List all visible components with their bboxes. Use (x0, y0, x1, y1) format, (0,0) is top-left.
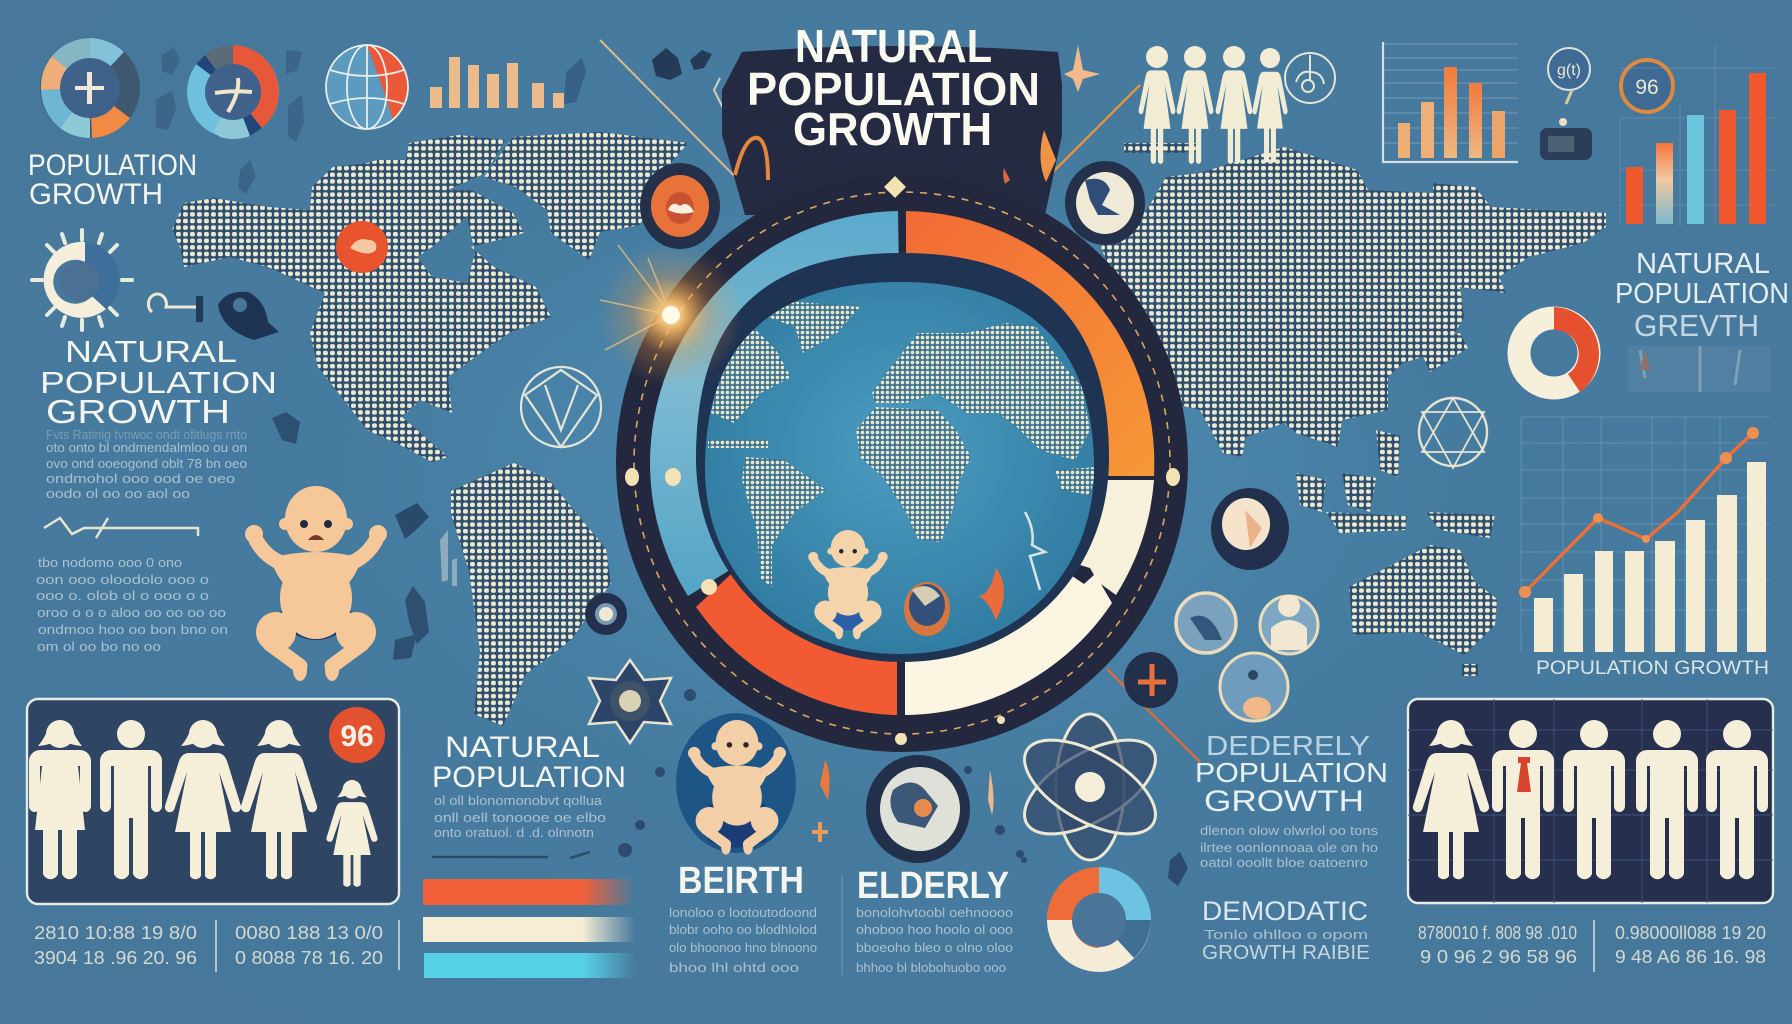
icon: orange sparks (812, 760, 994, 842)
icon: dark orange blob (1124, 652, 1178, 708)
heading: natural population growth left: NATURAL (65, 334, 237, 369)
ring segment: blue (650, 211, 902, 596)
person: man four (1706, 720, 1768, 879)
left star circle icon (521, 367, 601, 447)
hexagon icon three (1220, 653, 1288, 721)
left lower description text: oroo o o o aloo oo oo oo oo (37, 605, 226, 620)
hexagonal star icon (589, 660, 671, 743)
person: woman one (29, 720, 91, 879)
ring segment: white (905, 463, 1112, 715)
scattered icon tools (272, 412, 457, 660)
star circle icon right (1419, 398, 1487, 468)
globe map: Eurasia (872, 323, 1090, 460)
person: child (326, 780, 378, 887)
elderly text: bhhoo bl blobohuobo ooo (856, 960, 1006, 975)
stats under left panel: 3904 18 .96 20. 96 (34, 948, 197, 968)
heading: natural population growth left (40, 334, 277, 430)
icon: large baby (245, 486, 387, 681)
person: woman two (165, 720, 241, 879)
left lower description text: ondmoo hoo oo bon bno on (38, 622, 228, 637)
central ring infographic (616, 174, 1188, 752)
icon: magnifier (1548, 48, 1590, 104)
map: North America (172, 135, 551, 462)
people icons top right (1139, 46, 1288, 164)
main heading: NATURAL (795, 20, 992, 72)
dederely description text: oatol ooollt bloe oatoenro (1200, 855, 1368, 870)
left lower description text (36, 555, 228, 654)
left description text: oodo ol oo oo aol oo (46, 486, 190, 501)
panel: people right (1408, 699, 1773, 903)
elderly text (856, 905, 1013, 975)
birth text: olo bhoonoo hno blnoono (669, 940, 817, 955)
elderly text: bonolohvtoobl oehnoooo (856, 905, 1013, 920)
globe map: South America (742, 457, 826, 587)
globe icon (326, 45, 409, 129)
globe map: Greenland (768, 300, 860, 353)
icon: oval in globe (904, 582, 950, 636)
icon: orange ring badge (1621, 60, 1673, 112)
stats under right panel (1418, 920, 1766, 972)
heading: natural population growth right: GREVTH (1634, 308, 1759, 343)
icon: red tie (1517, 757, 1531, 792)
divider between birth and elderly (841, 875, 843, 975)
birth text (669, 905, 817, 975)
dashed orbit (634, 192, 1170, 734)
description text natural population (432, 793, 606, 858)
left lower description text: ooo o. olob ol o ooo o o (36, 588, 209, 603)
map: Australia (1349, 545, 1497, 676)
hexagon icon one (1176, 593, 1236, 653)
map: arctic strip (1124, 143, 1200, 153)
left description text: ondmohol ooo ood oe oeo (46, 471, 235, 486)
stats under right panel: 0.98000ll088 19 20 (1615, 923, 1766, 943)
heading: natural population growth right: NATURAL (1636, 248, 1770, 280)
left description text: oto onto bl ondmendalmloo ou on (46, 440, 247, 455)
person: woman (1413, 720, 1489, 879)
icon: orange lock and flame (735, 130, 1056, 184)
icon: orange ring badge: 96 (1635, 76, 1659, 99)
globe map: North America (711, 327, 791, 423)
inner globe (705, 282, 1097, 654)
heading: demodatic growth rates: GROWTH RAIBIE (1202, 942, 1370, 964)
top-left bar chart (430, 57, 564, 108)
main heading: POPULATION (747, 63, 1040, 115)
person: man two (1563, 720, 1625, 879)
left description text (46, 427, 247, 501)
chart label: POPULATION GROWTH (1536, 658, 1769, 679)
top donut chart two (187, 45, 279, 139)
icon: atom (1010, 714, 1170, 860)
person: man (100, 720, 162, 879)
stats under left panel: 0 8088 78 16. 20 (235, 948, 383, 968)
growth chart right (1519, 417, 1770, 679)
birth text: lonoloo o lootoutodoond (669, 905, 817, 920)
person three (1216, 46, 1252, 164)
donut chart right (1519, 307, 1599, 392)
heading: demodatic growth rates (1202, 896, 1370, 964)
badge: cream icon (1065, 161, 1145, 245)
person four (1252, 48, 1288, 163)
dederely description text (1200, 823, 1379, 870)
description text natural population: ol oll blonomonobvt qollua (434, 793, 603, 808)
panel: family left (27, 699, 399, 904)
stats under right panel: 8780010 f. 808 98 .010 (1418, 923, 1577, 943)
stats under left panel: 2810 10:88 19 8/0 (34, 923, 197, 943)
icon: orange fish (978, 568, 1004, 620)
icon: magnifier: g(t) (1557, 62, 1581, 79)
heading: population growth top-left (28, 149, 197, 211)
heading: natural population growth left: POPULATION (40, 365, 277, 400)
badge: percent: 96 (340, 720, 374, 753)
badge: lower right of ring (1211, 488, 1289, 570)
small ring icon (585, 593, 627, 635)
main heading (747, 20, 1040, 155)
sun flare on ring (599, 243, 743, 387)
map: Eurasia (1101, 147, 1606, 457)
icon: white scribble (1025, 512, 1045, 590)
globe map: Africa (856, 407, 971, 542)
badge: orange mouth (640, 163, 720, 249)
heading: elderly: ELDERLY (857, 865, 1009, 907)
stats under left panel (34, 920, 399, 972)
heading: dederely population growth: POPULATION (1195, 757, 1388, 788)
scribble icons top (156, 47, 586, 194)
main heading: GROWTH (793, 103, 992, 155)
stats under right panel: 9 0 96 2 96 58 96 (1420, 947, 1577, 967)
icon: small baby in globe (808, 530, 888, 639)
sun donut icon (32, 230, 132, 330)
left lower description text: om ol oo bo no oo (37, 639, 161, 654)
sparkle star near title (1064, 45, 1100, 92)
map: Greenland (484, 132, 688, 260)
left lower description text: oon ooo oloodolo ooo o (36, 572, 209, 587)
left description text: ovo ond ooeogond oblt 78 bn oeo (46, 456, 247, 471)
ring segment: cream (902, 480, 1154, 595)
small debris icons (618, 689, 1188, 886)
birth text: blobr ooho oo blodhlolod (669, 922, 817, 937)
hexagon icon two (1260, 595, 1318, 654)
heading: natural population bottom: POPULATION (432, 761, 626, 794)
bar chart top right (1383, 42, 1518, 162)
heading: dederely population growth: GROWTH (1204, 785, 1364, 818)
stats under left panel: 0080 188 13 0/0 (235, 923, 383, 943)
title panel (722, 46, 1062, 215)
small pointer line (44, 518, 198, 538)
leader lines (600, 40, 1200, 762)
heading: demodatic growth rates: Tonlo ohlloo o opom (1204, 927, 1368, 942)
badge: percent (329, 707, 385, 763)
heading: dederely population growth (1195, 730, 1388, 818)
person: man with tie (1492, 720, 1554, 879)
left lower description text: tbo nodomo ooo 0 ono (38, 555, 182, 570)
icon: baby in circle (676, 713, 796, 855)
heading: demodatic growth rates: DEMODATIC (1202, 896, 1368, 926)
heading: birth: BEIRTH (678, 860, 804, 902)
top scribble icons near title (652, 48, 726, 116)
icon: elderly circle (866, 755, 970, 863)
person: woman three (241, 720, 317, 879)
heading: natural population growth right (1615, 248, 1789, 343)
elderly text: bboeoho bleo o olno oloo (856, 940, 1013, 955)
dederely description text: ilrtee oonlonnoaa ole on ho (1200, 840, 1378, 855)
faded sketch under right heading (1628, 346, 1770, 392)
description text natural population: onll oell tonoooe oe elbo (434, 810, 606, 825)
ring segment: orange (906, 211, 1154, 476)
map: Southeast Asia islands (1296, 333, 1495, 538)
legend bars (423, 879, 636, 978)
person one (1139, 46, 1175, 164)
person: man three (1636, 720, 1698, 879)
heading: dederely population growth: DEDERELY (1206, 730, 1370, 761)
red location ball (336, 221, 388, 273)
elderly text: ohoboo hoo hoolo ol ooo (856, 922, 1013, 937)
heading: population growth top-left: GROWTH (29, 178, 163, 211)
person two (1177, 46, 1213, 164)
top-left donut chart (40, 38, 140, 138)
donut chart bottom (1047, 867, 1151, 972)
globe map continents (708, 300, 1097, 587)
heading: natural population bottom: NATURAL (445, 731, 600, 764)
birth text: bhoo lhl ohtd ooo (669, 960, 799, 975)
map: South America (451, 463, 611, 726)
heading: natural population growth left: GROWTH (46, 393, 230, 430)
heading: population growth top-left: POPULATION (28, 149, 197, 182)
icon: gadget (1540, 118, 1592, 160)
key icon and dark cap (148, 292, 279, 340)
description text natural population: onto oratuol. d .d. olnnotn (434, 825, 594, 840)
bar chart far right (1620, 45, 1775, 226)
ring segment: red (696, 463, 897, 715)
dederely description text: dlenon olow olwrlol oo tons (1200, 823, 1379, 838)
heading: natural population bottom (432, 731, 626, 794)
ring nodes (625, 176, 1180, 745)
globe map: islands (708, 440, 1097, 495)
world dot map (172, 132, 1606, 726)
icon: ring symbol top right (1285, 53, 1335, 103)
stats under right panel: 9 48 A6 86 16. 98 (1615, 947, 1766, 967)
left description text: Fvts Ratinig tvnwoc ondt ofitlugs rnto (46, 427, 247, 442)
